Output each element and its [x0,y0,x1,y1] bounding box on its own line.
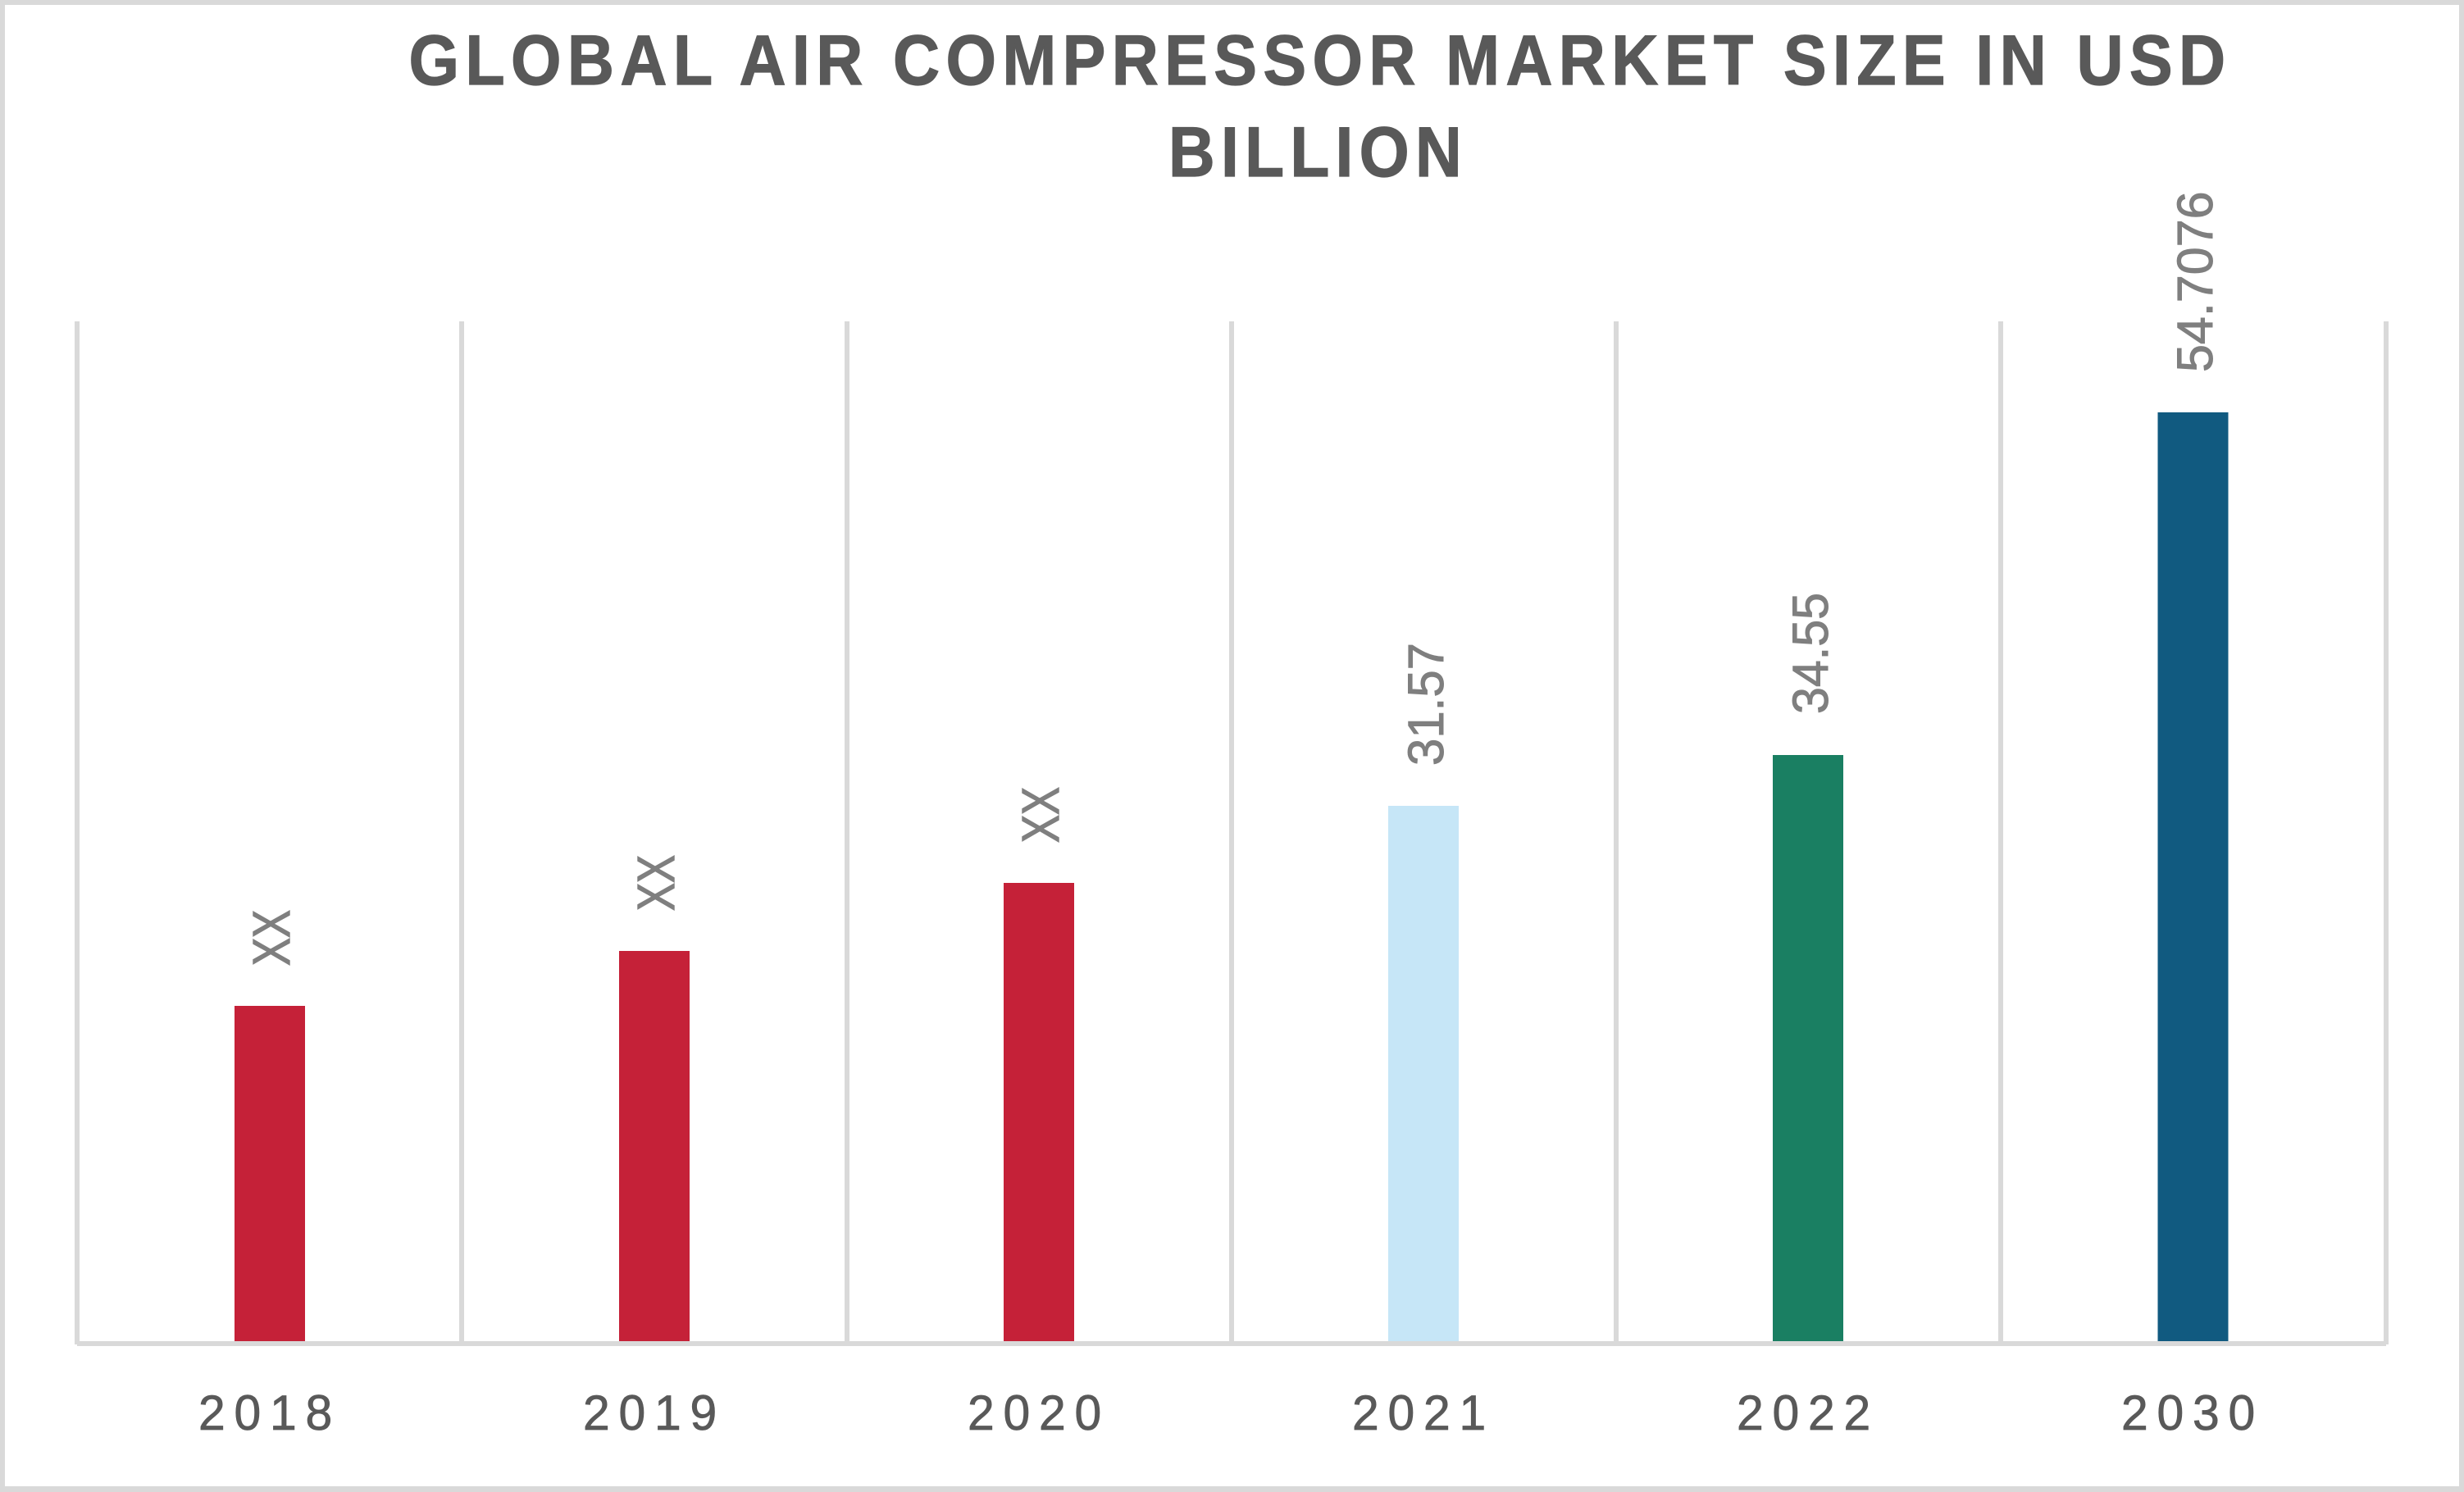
data label: 2030: 54.7076 [2167,192,2223,372]
title [408,21,2232,192]
title: BILLION [1168,113,1468,192]
title: GLOBAL AIR COMPRESSOR MARKET SIZE IN USD [408,21,2232,100]
axis label: 2018: 2018 [198,1385,341,1440]
bar: 2021 [1388,806,1459,1341]
bar: 2022 [1773,755,1843,1341]
data label: 2022: 34.55 [1783,593,1838,714]
axis label: 2022: 2022 [1737,1385,1879,1440]
chart gridlines and axis [75,321,2389,1346]
bar: 2030 [2158,412,2229,1341]
data label: 2019: XX [626,855,685,911]
data label: 2021: 31.57 [1398,643,1454,766]
data label: 2020: XX [1011,787,1070,843]
bar: 2018 [235,1006,305,1341]
axis label: 2020: 2020 [968,1385,1110,1440]
data label: 2018: XX [242,910,301,966]
axis label: 2021: 2021 [1352,1385,1495,1440]
axis label: 2019: 2019 [583,1385,726,1440]
bar: 2019 [619,951,690,1341]
bar: 2020 [1004,883,1074,1341]
axis label: 2030: 2030 [2121,1385,2264,1440]
